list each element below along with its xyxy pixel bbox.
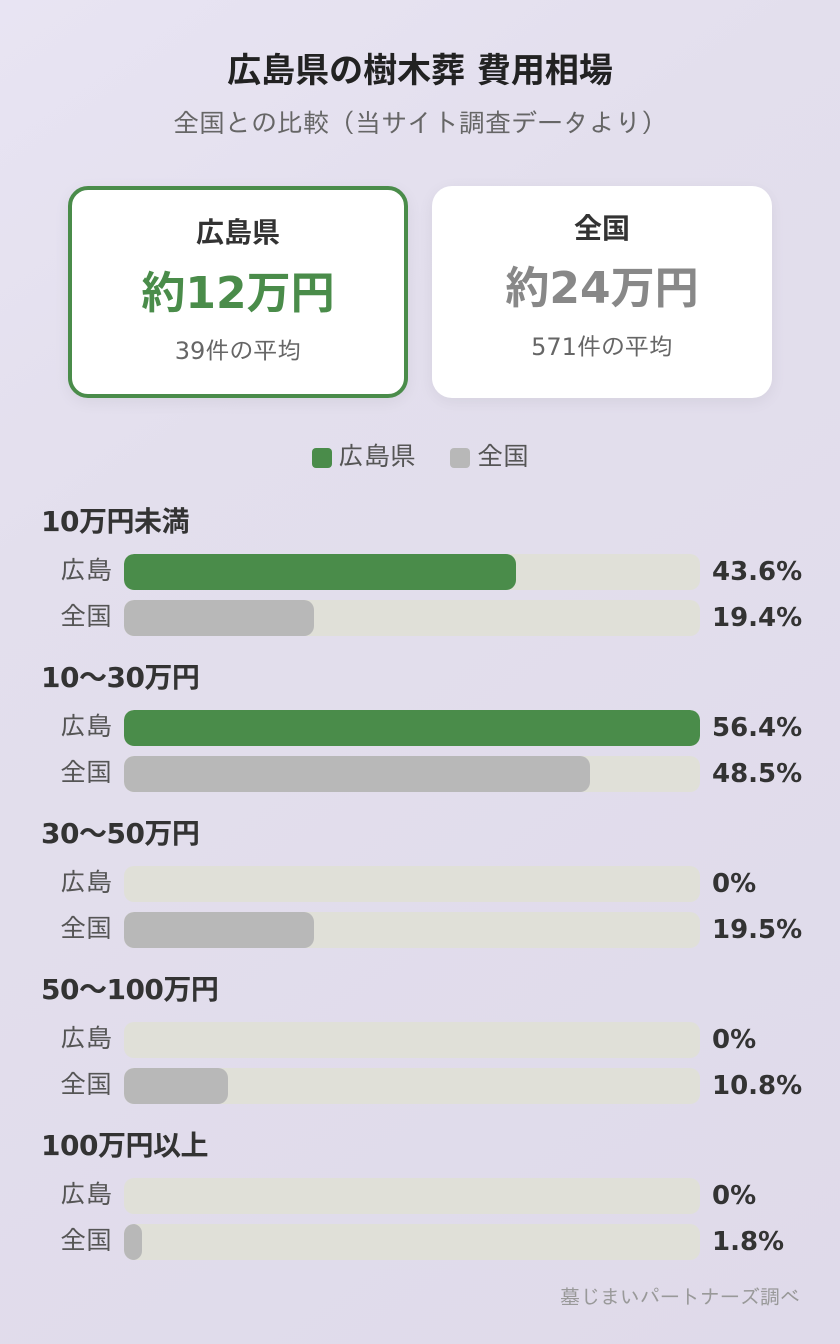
row label Hiroshima: 広島 <box>60 556 112 586</box>
source note: 墓じまいパートナーズ調べ <box>560 1285 800 1309</box>
row label Hiroshima: 広島 <box>60 868 112 898</box>
bar national <box>124 600 700 636</box>
card price: national: 約24万円 <box>505 263 699 314</box>
chart group: 100k to 300k yen <box>41 661 802 792</box>
bar Hiroshima <box>124 554 700 590</box>
bar national <box>124 912 700 948</box>
row label national: 全国 <box>60 914 112 944</box>
value national: 19.5% <box>712 915 802 945</box>
bar national <box>124 1068 700 1104</box>
value Hiroshima: 56.4% <box>712 713 802 743</box>
value Hiroshima: 43.6% <box>712 557 802 587</box>
legend swatch: national <box>450 448 470 468</box>
title: 広島県の樹木葬 費用相場 <box>227 51 613 91</box>
chart group: 300k to 500k yen <box>41 817 802 948</box>
legend swatch: Hiroshima <box>312 448 332 468</box>
bar national <box>124 756 700 792</box>
chart group: over 1M yen <box>41 1129 784 1260</box>
panel: Hiroshima average <box>68 186 408 398</box>
group heading: 10～30万円 <box>41 661 199 694</box>
card count: Hiroshima: 39件の平均 <box>175 337 301 365</box>
group heading: 10万円未満 <box>41 505 189 538</box>
row label Hiroshima: 広島 <box>60 712 112 742</box>
bar Hiroshima <box>124 1178 700 1214</box>
row label Hiroshima: 広島 <box>60 1180 112 1210</box>
legend <box>312 442 529 472</box>
row label Hiroshima: 広島 <box>60 1024 112 1054</box>
value Hiroshima: 0% <box>712 869 756 899</box>
bar Hiroshima <box>124 1022 700 1058</box>
panel: national average <box>432 186 772 398</box>
row label national: 全国 <box>60 1226 112 1256</box>
bar national <box>124 1224 700 1260</box>
subtitle: 全国との比較（当サイト調査データより） <box>173 109 667 139</box>
card label: national: 全国 <box>574 212 630 245</box>
card price: Hiroshima: 約12万円 <box>141 268 335 319</box>
chart group: 500k to 1M yen <box>41 973 802 1104</box>
value national: 48.5% <box>712 759 802 789</box>
value Hiroshima: 0% <box>712 1181 756 1211</box>
value national: 10.8% <box>712 1071 802 1101</box>
group heading: 50～100万円 <box>41 973 218 1006</box>
row label national: 全国 <box>60 1070 112 1100</box>
value national: 19.4% <box>712 603 802 633</box>
value Hiroshima: 0% <box>712 1025 756 1055</box>
card label: Hiroshima: 広島県 <box>196 216 280 249</box>
group heading: 100万円以上 <box>41 1129 208 1162</box>
bar Hiroshima <box>124 866 700 902</box>
legend label: Hiroshima: 広島県 <box>338 442 416 472</box>
legend label: national: 全国 <box>477 442 529 472</box>
card count: national: 571件の平均 <box>531 333 673 361</box>
chart group: under 100k yen <box>41 505 802 636</box>
row label national: 全国 <box>60 602 112 632</box>
bar Hiroshima <box>124 710 700 746</box>
group heading: 30～50万円 <box>41 817 199 850</box>
row label national: 全国 <box>60 758 112 788</box>
value national: 1.8% <box>712 1227 784 1257</box>
